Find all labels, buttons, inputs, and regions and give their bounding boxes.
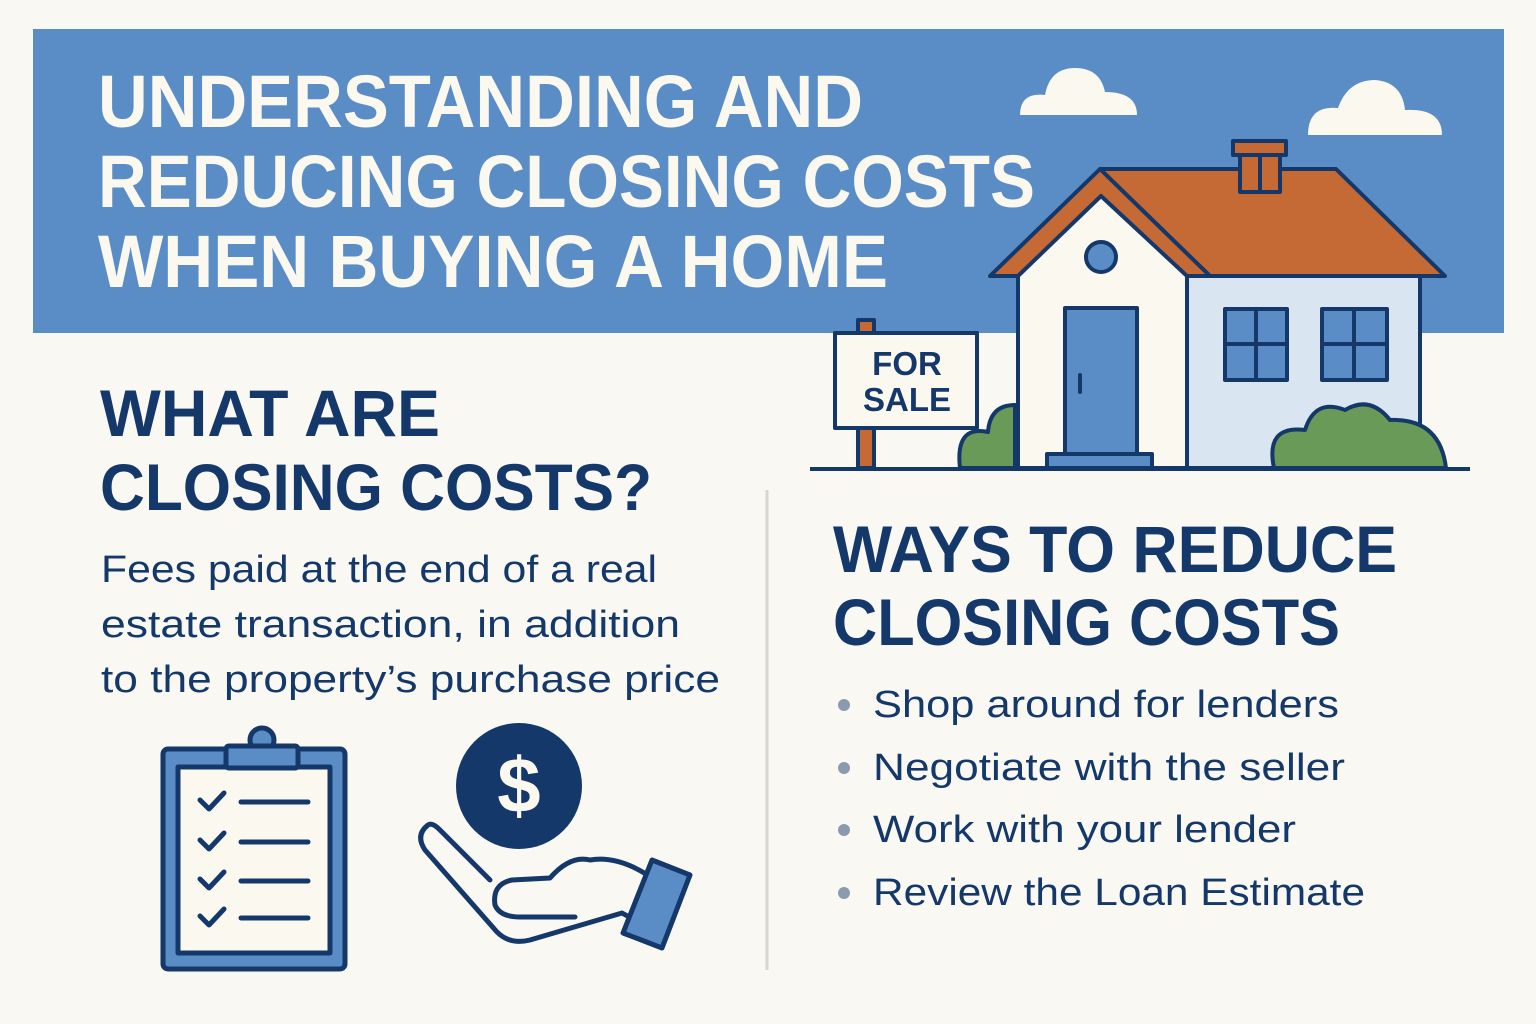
title: WHEN BUYING A HOME	[98, 220, 888, 303]
list: ways to reduce: Shop around for lenders	[873, 684, 1339, 726]
text: definition: to the property’s purchase price	[101, 659, 720, 701]
title: REDUCING CLOSING COSTS	[98, 140, 1035, 223]
heading: ways to reduce closing costs: WAYS TO REDUCE	[833, 512, 1397, 586]
sign text	[863, 345, 951, 418]
list: ways to reduce: Review the Loan Estimate	[873, 872, 1365, 914]
text: definition: estate transaction, in addition	[101, 604, 680, 646]
text: definition	[101, 549, 720, 701]
title: UNDERSTANDING AND	[98, 60, 863, 143]
heading: ways to reduce closing costs	[833, 512, 1397, 659]
heading: what are closing costs: CLOSING COSTS?	[100, 450, 652, 524]
icon: clipboard checklist	[163, 728, 345, 969]
sign text: SALE	[863, 381, 951, 418]
icon: hand holding dollar coin	[421, 723, 690, 948]
icon: clouds	[1020, 68, 1442, 135]
heading: what are closing costs: WHAT ARE	[100, 376, 440, 450]
title	[98, 60, 1035, 303]
text: definition: Fees paid at the end of a real	[101, 549, 657, 591]
illustration: house with for sale sign	[810, 141, 1470, 469]
icon: hand holding dollar coin: $	[497, 741, 541, 829]
sign text: FOR	[872, 345, 942, 382]
banner	[33, 29, 1504, 333]
list: ways to reduce: Negotiate with the seller	[873, 747, 1345, 789]
list: ways to reduce	[838, 684, 1365, 914]
heading: what are closing costs	[100, 376, 652, 524]
heading: ways to reduce closing costs: CLOSING COSTS	[833, 585, 1340, 659]
list: ways to reduce: Work with your lender	[873, 809, 1296, 851]
